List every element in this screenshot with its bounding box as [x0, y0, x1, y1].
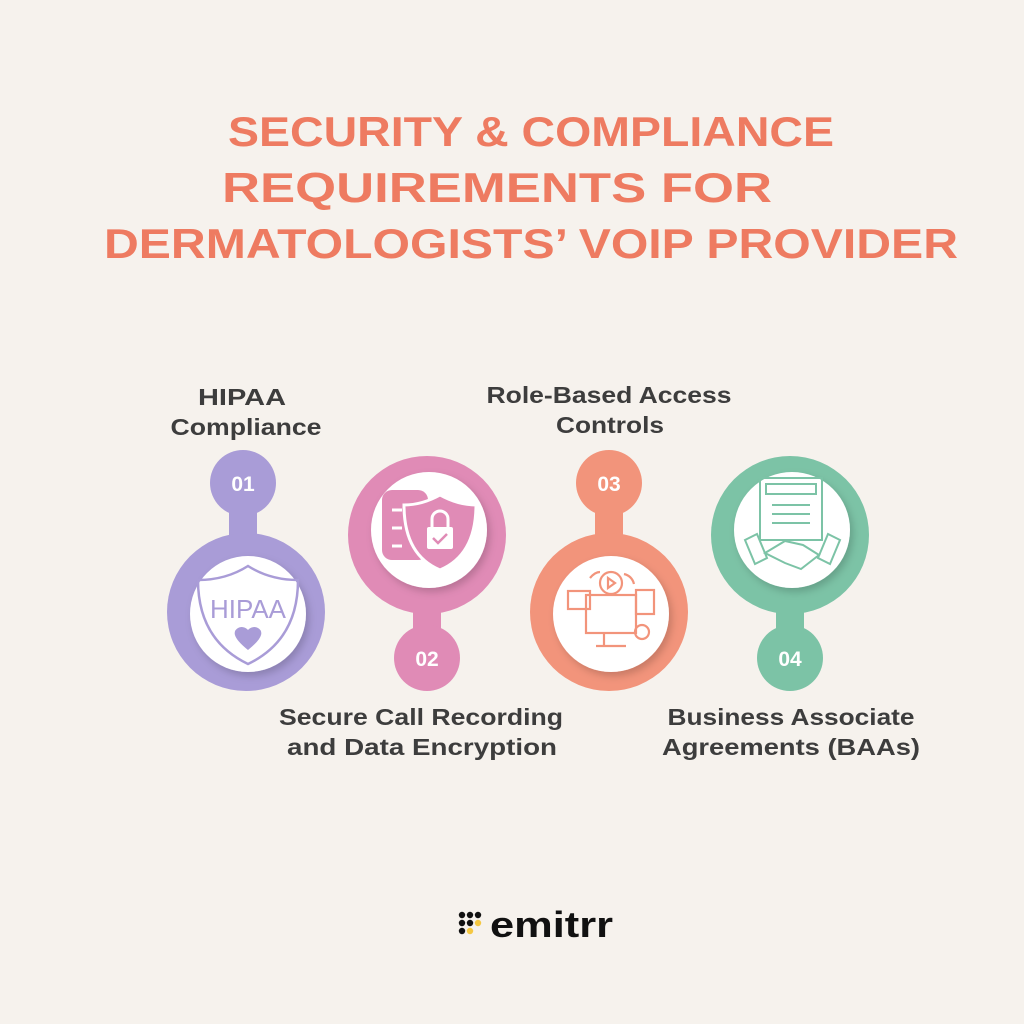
- label 04: [662, 704, 920, 760]
- number 03: 03: [597, 473, 621, 496]
- logo: emitrr: emitrr: [490, 904, 613, 945]
- step 02: secure call recording: [279, 456, 563, 760]
- number 01: 01: [231, 473, 255, 496]
- label 02: [279, 704, 563, 760]
- label 03: Controls: [556, 412, 664, 438]
- label 03: Role-Based Access: [486, 382, 732, 408]
- label 03: [486, 382, 732, 438]
- logo: emitrr: [459, 904, 613, 945]
- number 02: 02: [415, 648, 439, 671]
- icon: monitor workflow: [553, 556, 669, 672]
- label 01: [170, 384, 322, 440]
- label 02: and Data Encryption: [287, 734, 557, 760]
- icon: contract handshake: [734, 472, 850, 588]
- shape 01: [167, 450, 325, 691]
- label 01: HIPAA: [198, 384, 286, 410]
- shape 04: [711, 456, 869, 691]
- icon: database shield: [371, 472, 487, 588]
- icon: HIPAA shield: HIPAA: [210, 594, 287, 624]
- label 02: Secure Call Recording: [279, 704, 563, 730]
- shape 02: [348, 456, 506, 691]
- shape 03: [530, 450, 688, 691]
- label 01: Compliance: [170, 414, 322, 440]
- icon: HIPAA shield: [190, 556, 306, 672]
- title: [104, 108, 958, 267]
- title: REQUIREMENTS FOR: [222, 164, 772, 211]
- label 04: Agreements (BAAs): [662, 734, 920, 760]
- step 01: HIPAA compliance: [167, 384, 325, 691]
- label 04: Business Associate: [668, 704, 914, 730]
- step 04: BAAs: [662, 456, 920, 760]
- number 04: 04: [778, 648, 802, 671]
- step 03: role-based access: [486, 382, 732, 691]
- title: DERMATOLOGISTS’ VOIP PROVIDER: [104, 220, 958, 267]
- title: SECURITY & COMPLIANCE: [228, 108, 834, 155]
